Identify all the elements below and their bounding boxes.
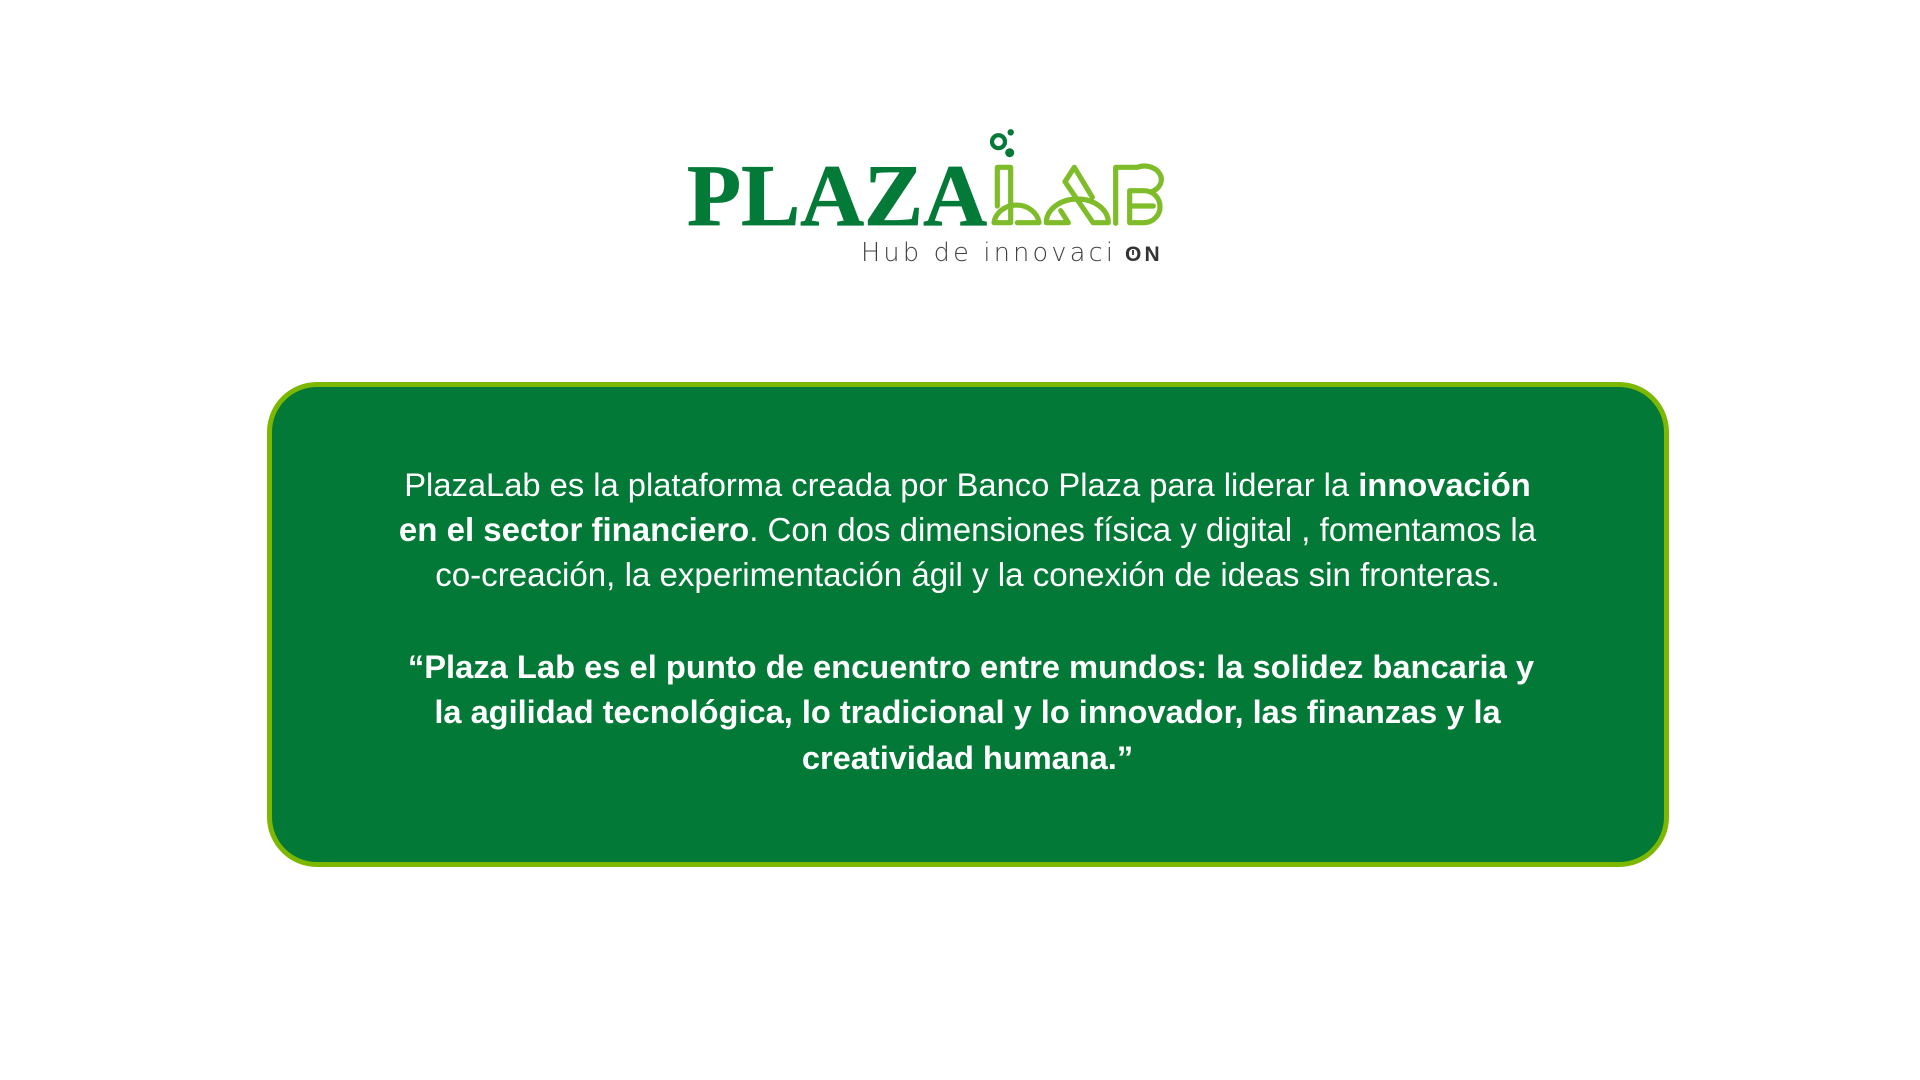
- text block: quote: [408, 648, 1534, 776]
- logo: PlazaLab Hub de innovacion: [687, 129, 1164, 268]
- logo icon: bubbles: [992, 129, 1014, 157]
- logo tagline: O: [1125, 243, 1141, 266]
- text block: quote: “Plaza Lab es el punto de encuentro entre mundos: la solidez bancaria y: [408, 648, 1534, 685]
- panel: green description card: [267, 382, 1669, 867]
- text block: description: en el sector financiero. Con dos dimensiones física y digital , fomentamos la: [399, 511, 1536, 548]
- text block: quote: creatividad humana.”: [802, 739, 1133, 776]
- text block: quote: la agilidad tecnológica, lo tradicional y lo innovador, las finanzas y la: [434, 693, 1501, 730]
- text block: description: co-creación, la experimentación ágil y la conexión de ideas sin fronteras.: [435, 557, 1500, 594]
- text block: description: [399, 466, 1536, 594]
- text block: description: PlazaLab es la plataforma creada por Banco Plaza para liderar la innovación: [404, 466, 1531, 503]
- logo wordmark: PLAZA: PLAZA: [687, 148, 987, 245]
- logo wordmark: LAB: [994, 166, 1161, 223]
- logo tagline: N: [1144, 243, 1160, 266]
- logo tagline: Hub de innovaci: [861, 238, 1113, 268]
